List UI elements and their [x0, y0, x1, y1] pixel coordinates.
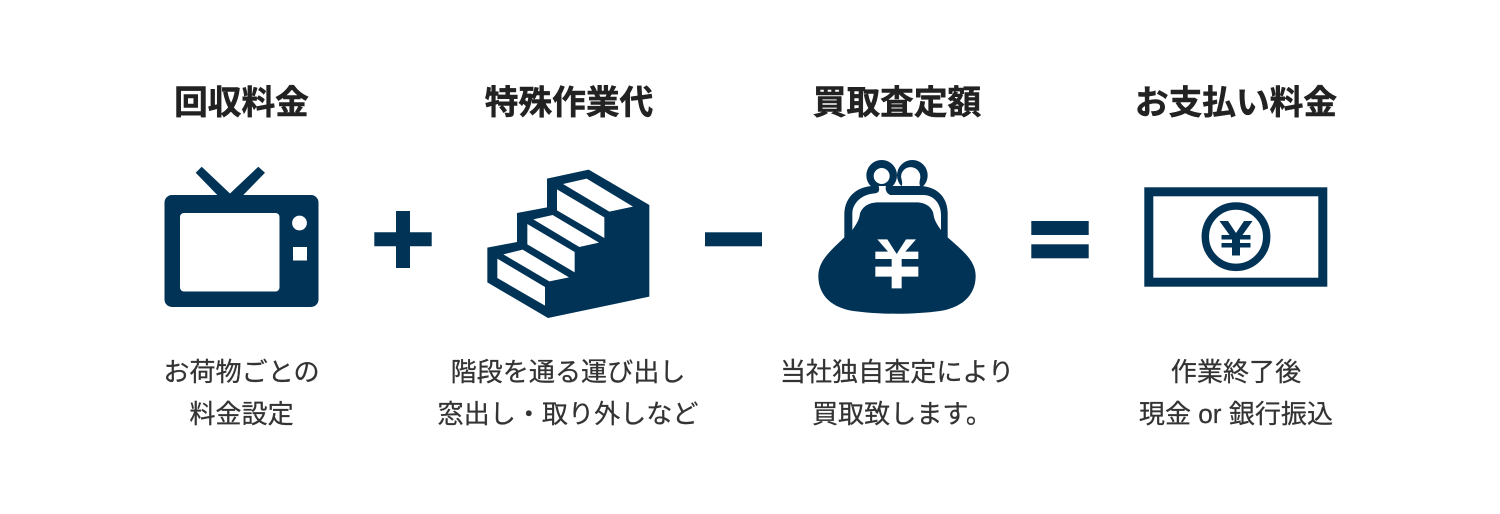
heading: collection fee: 回収料金 [174, 84, 309, 122]
text: after work, cash or bank transfer: 現金 or 銀行振込 [1139, 398, 1333, 428]
text: stair carrying and window removal [438, 356, 698, 428]
icon: television [164, 167, 318, 307]
text: stair carrying and window removal: 窓出し・取り外しなど [438, 398, 698, 428]
icon: stairs [487, 170, 649, 318]
text: in-house appraisal [780, 356, 1014, 428]
text: in-house appraisal: 当社独自査定により [780, 356, 1014, 386]
heading: payment amount: お支払い料金 [1135, 84, 1337, 122]
heading: special work fee: 特殊作業代 [485, 84, 653, 122]
icon: coin purse [818, 160, 976, 314]
text: stair carrying and window removal: 階段を通る運び出し [451, 356, 685, 386]
operator: equals [1031, 221, 1089, 258]
text: after work, cash or bank transfer [1139, 356, 1333, 428]
operator: plus [374, 211, 432, 268]
text: in-house appraisal: 買取致します。 [812, 398, 992, 428]
text: per-item pricing [163, 356, 320, 428]
heading: purchase appraisal: 買取査定額 [813, 84, 981, 122]
text: per-item pricing: 料金設定 [189, 398, 294, 428]
operator: minus [705, 232, 762, 246]
icon: banknote with yen [1149, 192, 1323, 282]
text: after work, cash or bank transfer: 作業終了後 [1171, 356, 1301, 386]
text: per-item pricing: お荷物ごとの [163, 356, 320, 386]
